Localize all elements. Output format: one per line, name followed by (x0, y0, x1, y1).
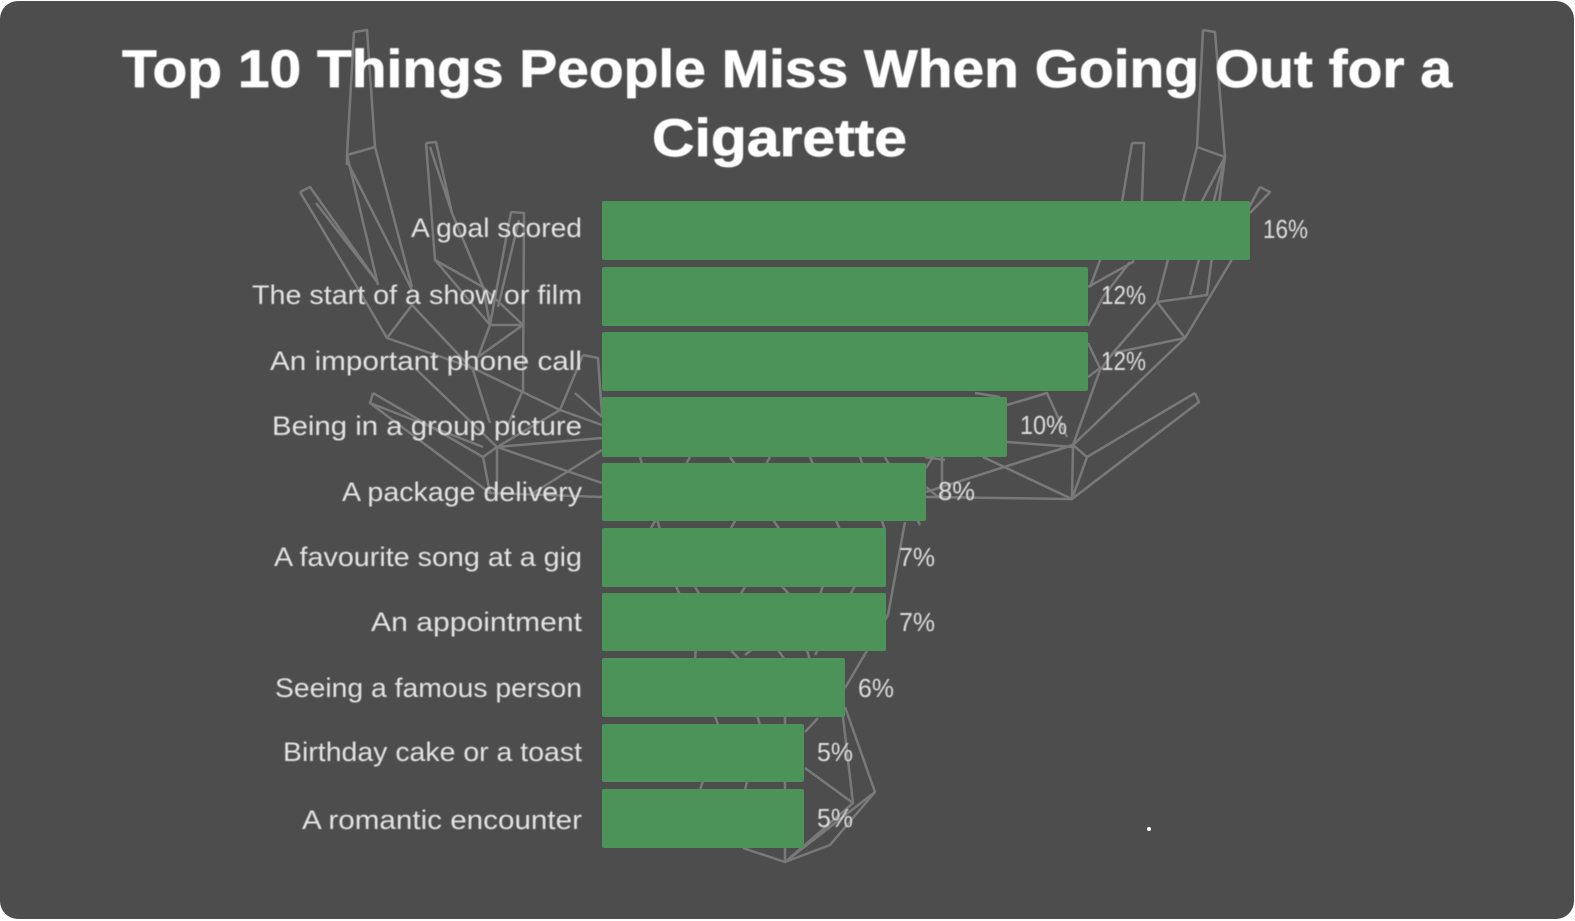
value labels: 10% (1020, 410, 1067, 440)
value labels: 5% (817, 737, 853, 767)
category labels: An important phone call (270, 346, 582, 376)
category labels (252, 213, 583, 835)
title: Cigarette (652, 109, 907, 168)
value labels: 7% (899, 542, 935, 572)
title: Top 10 Things People Miss When Going Out for a (122, 40, 1453, 99)
value labels (817, 214, 1308, 833)
value labels: 6% (858, 673, 894, 703)
category labels: Birthday cake or a toast (283, 737, 583, 767)
value labels: 8% (938, 476, 975, 506)
category labels: Seeing a famous person (275, 673, 582, 703)
small white dot (1147, 827, 1151, 831)
right hand (926, 30, 1270, 499)
category labels: A favourite song at a gig (274, 542, 582, 572)
bars (602, 201, 1250, 848)
value labels: 5% (817, 803, 853, 833)
category labels: A goal scored (411, 213, 582, 243)
icon: open hands line art (300, 30, 1270, 862)
value labels: 12% (1101, 346, 1146, 376)
wrist and palm network (640, 457, 945, 862)
category labels: Being in a group picture (272, 411, 582, 441)
value labels: 7% (899, 607, 935, 637)
value labels: 16% (1263, 214, 1308, 244)
category labels: A package delivery (342, 477, 583, 507)
value labels: 12% (1101, 280, 1146, 310)
category labels: A romantic encounter (302, 805, 582, 835)
category labels: The start of a show or film (252, 280, 582, 310)
title (122, 40, 1453, 168)
left hand (300, 30, 602, 497)
bar chart (252, 201, 1308, 848)
category labels: An appointment (371, 607, 583, 637)
